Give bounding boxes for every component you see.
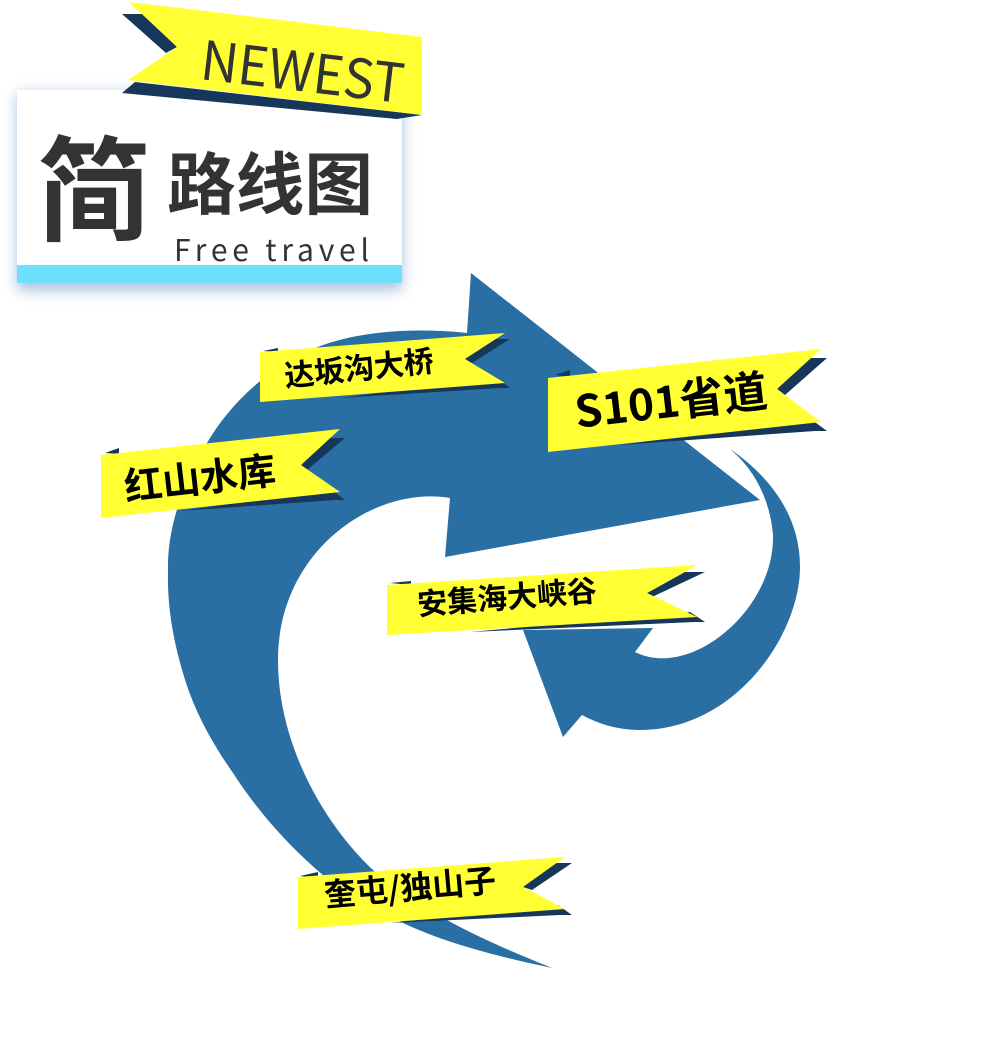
subtitle: Free travel <box>174 226 369 270</box>
ribbon: S101 provincial road <box>548 349 827 452</box>
heading: large character: 简 <box>37 100 151 265</box>
ribbon shadow <box>122 14 422 119</box>
ribbon: Anjihai Grand Canyon <box>387 565 705 635</box>
card panel <box>17 90 402 283</box>
cyan bar <box>17 265 402 283</box>
ribbon: S101 provincial road: S101省道 <box>571 355 770 441</box>
heading: route map: 路线图 <box>167 130 373 229</box>
large curved arrow <box>168 273 760 968</box>
ribbon: Hongshan Reservoir <box>101 429 345 518</box>
small curved arrow <box>523 449 800 737</box>
NEWEST ribbon <box>122 2 422 119</box>
ribbon: Dabangou Bridge: 达坂沟大桥 <box>282 336 436 396</box>
ribbon: Kuitun / Dushanzi: 奎屯/独山子 <box>322 856 498 916</box>
ribbon: Hongshan Reservoir: 红山水库 <box>121 440 278 511</box>
title card <box>17 90 402 290</box>
ribbon body <box>128 2 422 115</box>
card shadow <box>17 93 402 290</box>
ribbon: Kuitun / Dushanzi <box>298 856 572 929</box>
ribbon: Dabangou Bridge <box>260 333 510 402</box>
ribbon: Anjihai Grand Canyon: 安集海大峡谷 <box>415 566 598 624</box>
ribbon label: NEWEST <box>197 16 409 119</box>
